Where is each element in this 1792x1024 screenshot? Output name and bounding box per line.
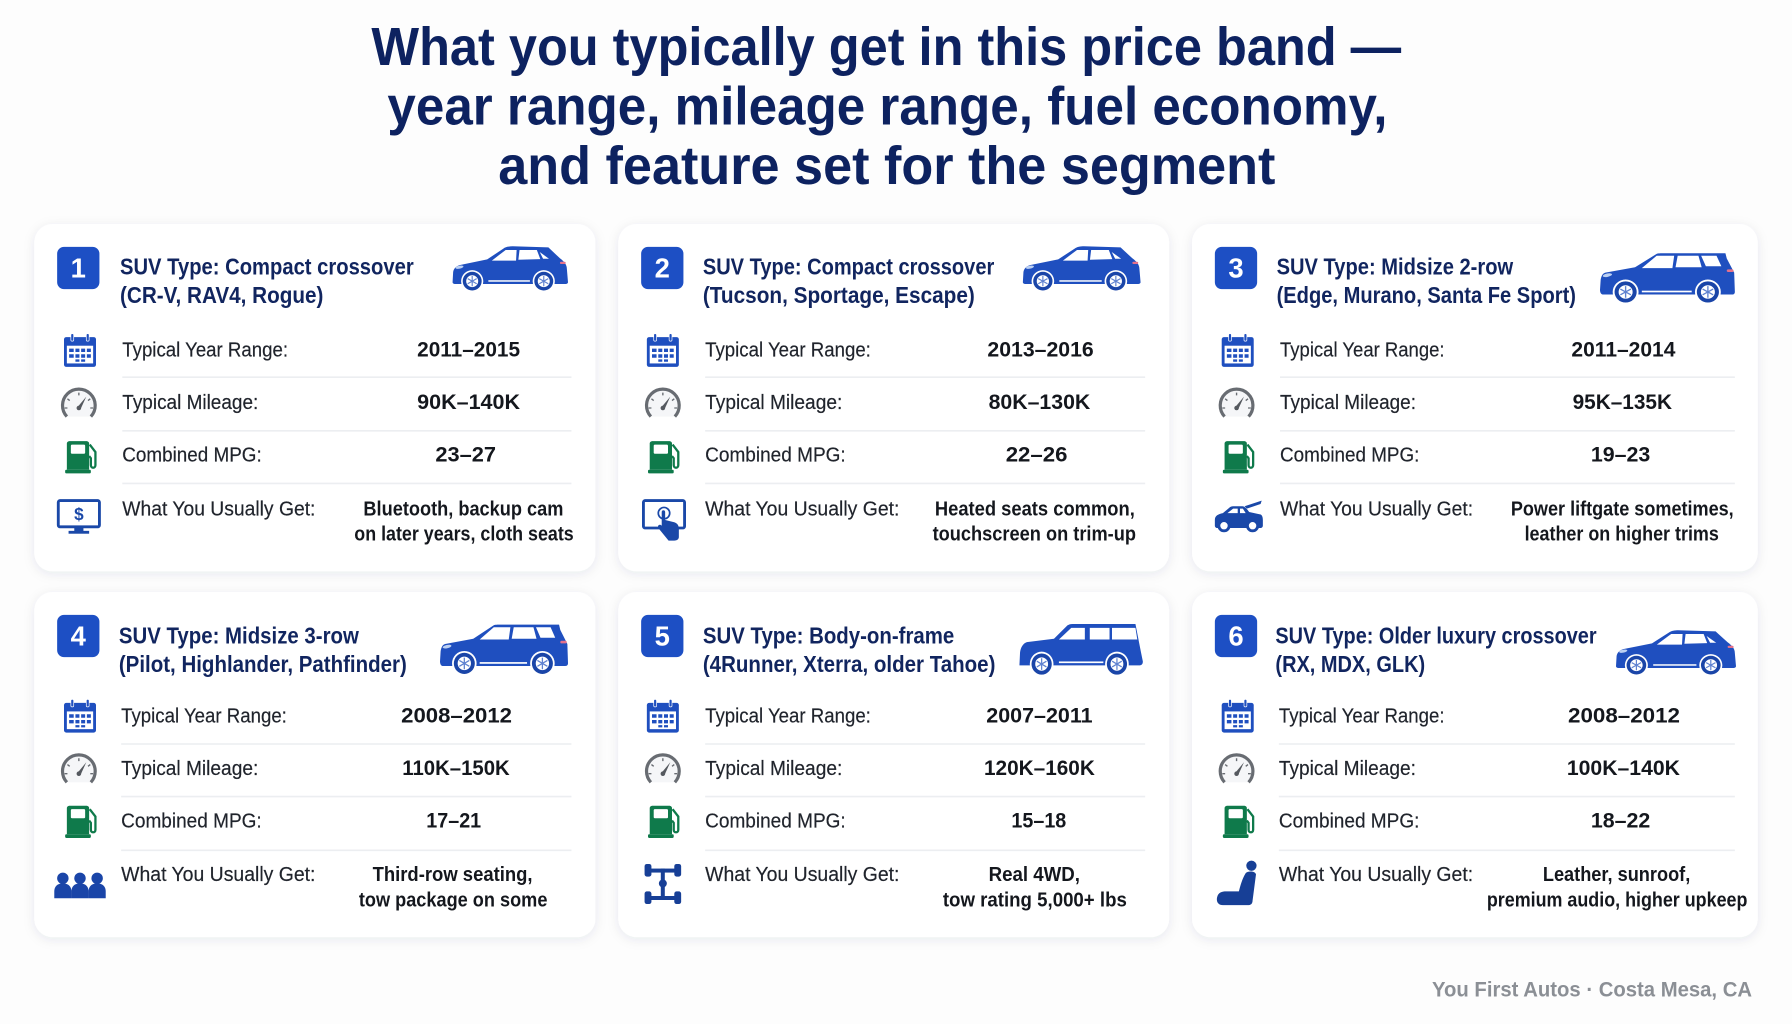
card 6 fuel pump icon bbox=[1223, 806, 1253, 838]
card 4 heading: (Pilot, Highlander, Pathfinder) bbox=[119, 651, 407, 677]
card 1 rows: Bluetooth, backup cam bbox=[363, 498, 563, 520]
card 4 rows: Third-row seating, bbox=[373, 864, 533, 886]
card 4 rows: Typical Mileage: bbox=[121, 758, 258, 780]
card 4 rows: 110K–150K bbox=[402, 755, 510, 780]
card 1 monitor icon bbox=[58, 501, 99, 534]
card 1 number badge: 1 bbox=[71, 253, 86, 284]
panel: card 1 compact crossover bbox=[34, 224, 595, 571]
card 4 number badge bbox=[57, 615, 99, 657]
card 1 rows: Typical Mileage: bbox=[122, 392, 258, 414]
card 5 rows: 15–18 bbox=[1011, 807, 1066, 832]
title bbox=[371, 17, 1401, 196]
card 6 number badge bbox=[1215, 615, 1257, 657]
card 6 gauge icon bbox=[1220, 754, 1253, 782]
card 4 rows: Combined MPG: bbox=[121, 810, 262, 832]
card 6 number badge: 6 bbox=[1228, 621, 1244, 652]
card 2 rows: Heated seats common, bbox=[935, 498, 1135, 520]
card 1 monitor icon: $ bbox=[74, 504, 84, 524]
card 5 background bbox=[618, 592, 1169, 937]
card 4 rows: What You Usually Get: bbox=[121, 864, 315, 886]
card 3 rows bbox=[1280, 337, 1735, 546]
card 4 calendar icon bbox=[64, 699, 96, 733]
card 6 heading: (RX, MDX, GLK) bbox=[1275, 651, 1425, 677]
card 3 rows: What You Usually Get: bbox=[1280, 498, 1473, 520]
card 3 rows: leather on higher trims bbox=[1525, 524, 1719, 546]
footer credit: You First Autos · Costa Mesa, CA bbox=[1432, 977, 1752, 1002]
card 6 heading bbox=[1275, 622, 1597, 677]
card 3 car icon bbox=[1600, 253, 1735, 304]
card 5 rows: Typical Mileage: bbox=[705, 758, 842, 780]
card 2 rows: touchscreen on trim-up bbox=[933, 524, 1136, 546]
card 4 rows: tow package on some bbox=[359, 889, 547, 911]
card 3 rows: Typical Mileage: bbox=[1280, 392, 1416, 414]
card 3 number badge: 3 bbox=[1228, 253, 1244, 284]
card 5 heading bbox=[703, 622, 995, 677]
card 5 calendar icon bbox=[647, 699, 679, 733]
card 3 fuel pump icon bbox=[1223, 441, 1253, 473]
card 2 rows bbox=[705, 337, 1145, 546]
card 5 rows: tow rating 5,000+ lbs bbox=[943, 889, 1127, 911]
card 4 heading: SUV Type: Midsize 3-row bbox=[119, 622, 359, 648]
card 1 rows: on later years, cloth seats bbox=[354, 524, 574, 546]
card 2 heading: SUV Type: Compact crossover bbox=[703, 253, 994, 279]
card 2 heading bbox=[703, 253, 994, 308]
card 1 rows: Combined MPG: bbox=[122, 445, 262, 467]
card 6 rows: Combined MPG: bbox=[1279, 810, 1419, 832]
card 5 number badge bbox=[641, 615, 683, 657]
card 1 fuel pump icon bbox=[65, 441, 95, 473]
card 5 fuel pump icon bbox=[648, 806, 678, 838]
card 4 background bbox=[34, 592, 595, 937]
card 5 rows: Combined MPG: bbox=[705, 810, 846, 832]
card 3 number badge bbox=[1215, 247, 1257, 289]
card 4 people icon bbox=[54, 873, 106, 898]
card 5 rows: What You Usually Get: bbox=[705, 864, 899, 886]
card 3 car with open liftgate icon bbox=[1215, 501, 1263, 531]
card 2 touchscreen icon bbox=[643, 501, 685, 541]
card 1 rows: 23–27 bbox=[435, 442, 496, 467]
card 4 rows: 17–21 bbox=[426, 807, 481, 832]
card 3 rows: Power liftgate sometimes, bbox=[1511, 498, 1734, 520]
card 3 rows: 19–23 bbox=[1591, 442, 1650, 467]
card 2 rows: 22–26 bbox=[1006, 442, 1067, 467]
card 6 seat icon bbox=[1217, 861, 1257, 905]
card 2 rows: Typical Mileage: bbox=[705, 392, 842, 414]
title: year range, mileage range, fuel economy, bbox=[387, 77, 1387, 137]
card 4 rows: 2008–2012 bbox=[401, 702, 512, 727]
card 1 car icon bbox=[453, 246, 568, 292]
card 2 number badge bbox=[641, 247, 683, 289]
card 6 car icon bbox=[1616, 630, 1736, 676]
card 6 rows: Leather, sunroof, bbox=[1543, 864, 1690, 886]
card 1 calendar icon bbox=[64, 334, 96, 367]
card 2 rows: Typical Year Range: bbox=[705, 340, 871, 362]
card 2 background bbox=[618, 224, 1169, 571]
card 1 rows: 2011–2015 bbox=[417, 337, 520, 362]
title: and feature set for the segment bbox=[498, 136, 1276, 196]
card 4 number badge: 4 bbox=[71, 621, 87, 652]
card 6 rows: 18–22 bbox=[1591, 807, 1650, 832]
card 5 heading: SUV Type: Body-on-frame bbox=[703, 622, 954, 648]
title: What you typically get in this price band — bbox=[371, 17, 1401, 77]
card 4 fuel pump icon bbox=[65, 806, 95, 838]
card 2 car icon bbox=[1023, 246, 1141, 292]
card 3 rows: Typical Year Range: bbox=[1280, 340, 1445, 362]
card 5 gauge icon bbox=[647, 754, 679, 782]
card 5 car icon bbox=[1019, 624, 1143, 676]
card 2 gauge icon bbox=[647, 389, 679, 417]
card 1 gauge icon bbox=[63, 389, 95, 417]
card 3 heading: SUV Type: Midsize 2-row bbox=[1277, 253, 1513, 279]
card 6 rows: 2008–2012 bbox=[1568, 702, 1680, 727]
card 1 number badge bbox=[57, 247, 99, 289]
card 2 rows: Combined MPG: bbox=[705, 445, 846, 467]
card 6 rows: What You Usually Get: bbox=[1279, 864, 1473, 886]
card 6 rows: Typical Mileage: bbox=[1279, 758, 1416, 780]
card 2 number badge: 2 bbox=[655, 253, 670, 284]
panel: card 4 midsize 3-row bbox=[34, 592, 595, 937]
card 6 rows bbox=[1279, 702, 1747, 911]
card 3 rows: 95K–135K bbox=[1573, 389, 1672, 414]
card 1 rows: 90K–140K bbox=[417, 389, 520, 414]
panel: card 2 compact crossover bbox=[618, 224, 1169, 571]
card 4 rows: Typical Year Range: bbox=[121, 705, 287, 727]
panel: card 6 older luxury crossover bbox=[1192, 592, 1758, 937]
panel: card 5 body-on-frame bbox=[618, 592, 1169, 937]
card 5 number badge: 5 bbox=[655, 621, 670, 652]
card 5 rows: Typical Year Range: bbox=[705, 705, 871, 727]
card 2 rows: What You Usually Get: bbox=[705, 498, 899, 520]
card 3 rows: 2011–2014 bbox=[1571, 337, 1675, 362]
card 3 heading: (Edge, Murano, Santa Fe Sport) bbox=[1277, 282, 1576, 308]
card 5 drivetrain icon bbox=[645, 864, 681, 904]
card 3 calendar icon bbox=[1222, 334, 1254, 367]
card 5 heading: (4Runner, Xterra, older Tahoe) bbox=[703, 651, 995, 677]
card 6 rows: Typical Year Range: bbox=[1279, 705, 1445, 727]
card 2 heading: (Tucson, Sportage, Escape) bbox=[703, 282, 975, 308]
card 2 calendar icon bbox=[647, 334, 679, 367]
card 4 heading bbox=[119, 622, 407, 677]
card 1 rows bbox=[122, 337, 574, 546]
card 6 heading: SUV Type: Older luxury crossover bbox=[1275, 622, 1597, 648]
card 2 fuel pump icon bbox=[648, 441, 678, 473]
card 5 rows: 120K–160K bbox=[984, 755, 1095, 780]
card 6 calendar icon bbox=[1222, 699, 1254, 733]
card 3 heading bbox=[1277, 253, 1576, 308]
card 4 rows bbox=[121, 702, 571, 911]
card 3 gauge icon bbox=[1220, 389, 1253, 417]
card 2 rows: 2013–2016 bbox=[987, 337, 1094, 362]
card 1 heading bbox=[120, 253, 414, 308]
card 2 rows: 80K–130K bbox=[989, 389, 1091, 414]
panel: card 3 midsize 2-row bbox=[1192, 224, 1758, 571]
card 1 background bbox=[34, 224, 595, 571]
card 5 rows: Real 4WD, bbox=[989, 864, 1080, 886]
card 6 rows: premium audio, higher upkeep bbox=[1487, 889, 1747, 911]
card 1 heading: (CR-V, RAV4, Rogue) bbox=[120, 282, 323, 308]
card 4 gauge icon bbox=[63, 754, 95, 782]
card 3 background bbox=[1192, 224, 1758, 571]
card 4 car icon bbox=[440, 625, 568, 676]
card 5 rows: 2007–2011 bbox=[986, 702, 1093, 727]
card 1 rows: Typical Year Range: bbox=[122, 340, 288, 362]
card 1 rows: What You Usually Get: bbox=[122, 498, 315, 520]
card 3 rows: Combined MPG: bbox=[1280, 445, 1419, 467]
card 5 rows bbox=[705, 702, 1145, 911]
card 6 background bbox=[1192, 592, 1758, 937]
card 6 rows: 100K–140K bbox=[1567, 755, 1680, 780]
card 1 heading: SUV Type: Compact crossover bbox=[120, 253, 414, 279]
